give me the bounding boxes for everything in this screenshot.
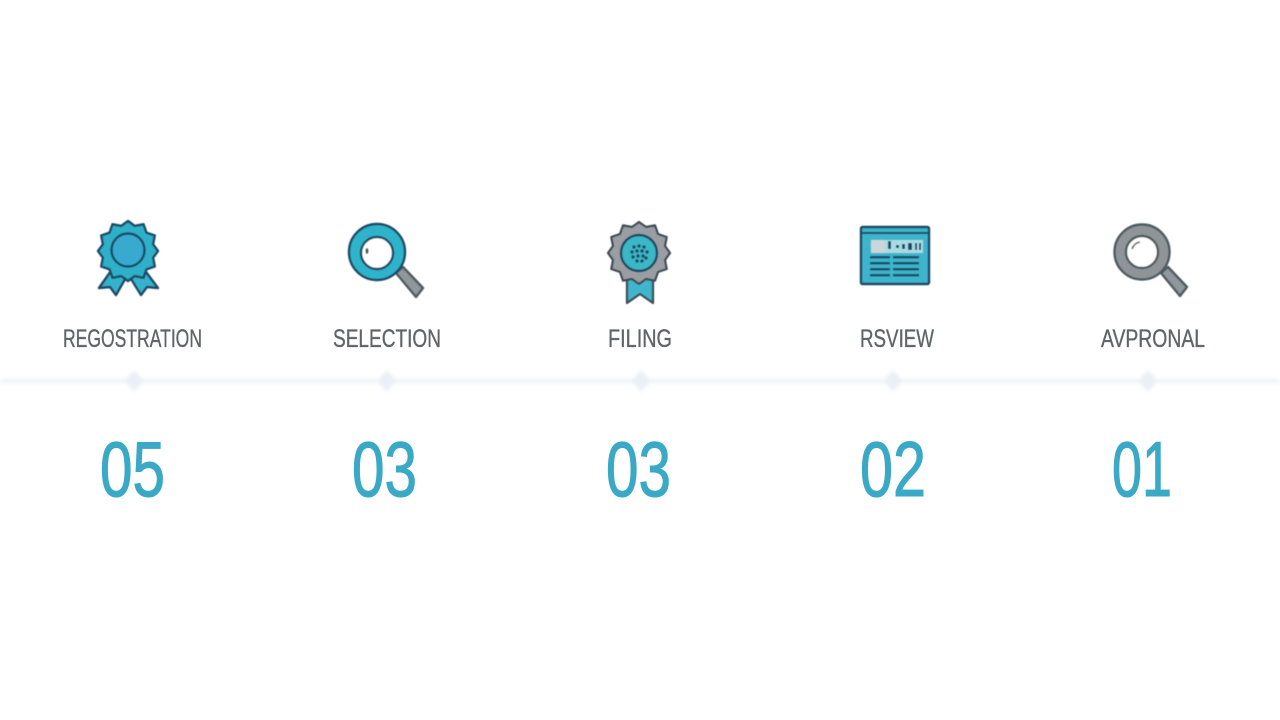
step 3: filing bbox=[606, 222, 672, 513]
label: approval: AVPRONAL bbox=[1101, 325, 1205, 353]
timeline axis with nodes bbox=[0, 370, 1280, 392]
label: review: RSVIEW bbox=[860, 325, 934, 353]
icon: grey seal with ribbon bbox=[608, 222, 670, 303]
step 2: selection bbox=[333, 224, 441, 513]
label: registration: REGOSTRATION bbox=[63, 325, 202, 353]
step 4: review bbox=[860, 227, 934, 513]
icon: award ribbon rosette bbox=[98, 221, 158, 295]
number: 03: 03 bbox=[606, 425, 671, 513]
number: 01: 01 bbox=[1112, 425, 1172, 513]
number: 05: 05 bbox=[100, 425, 165, 513]
icon: document window bbox=[861, 227, 929, 284]
step 5: approval bbox=[1101, 224, 1205, 513]
step 1: registration bbox=[63, 221, 202, 513]
label: selection: SELECTION bbox=[333, 325, 441, 353]
icon: teal magnifying glass bbox=[349, 224, 423, 297]
number: 03: 03 bbox=[352, 425, 417, 513]
icon: grey magnifying glass bbox=[1114, 224, 1187, 296]
number: 02: 02 bbox=[860, 425, 926, 513]
label: filing: FILING bbox=[608, 325, 672, 353]
